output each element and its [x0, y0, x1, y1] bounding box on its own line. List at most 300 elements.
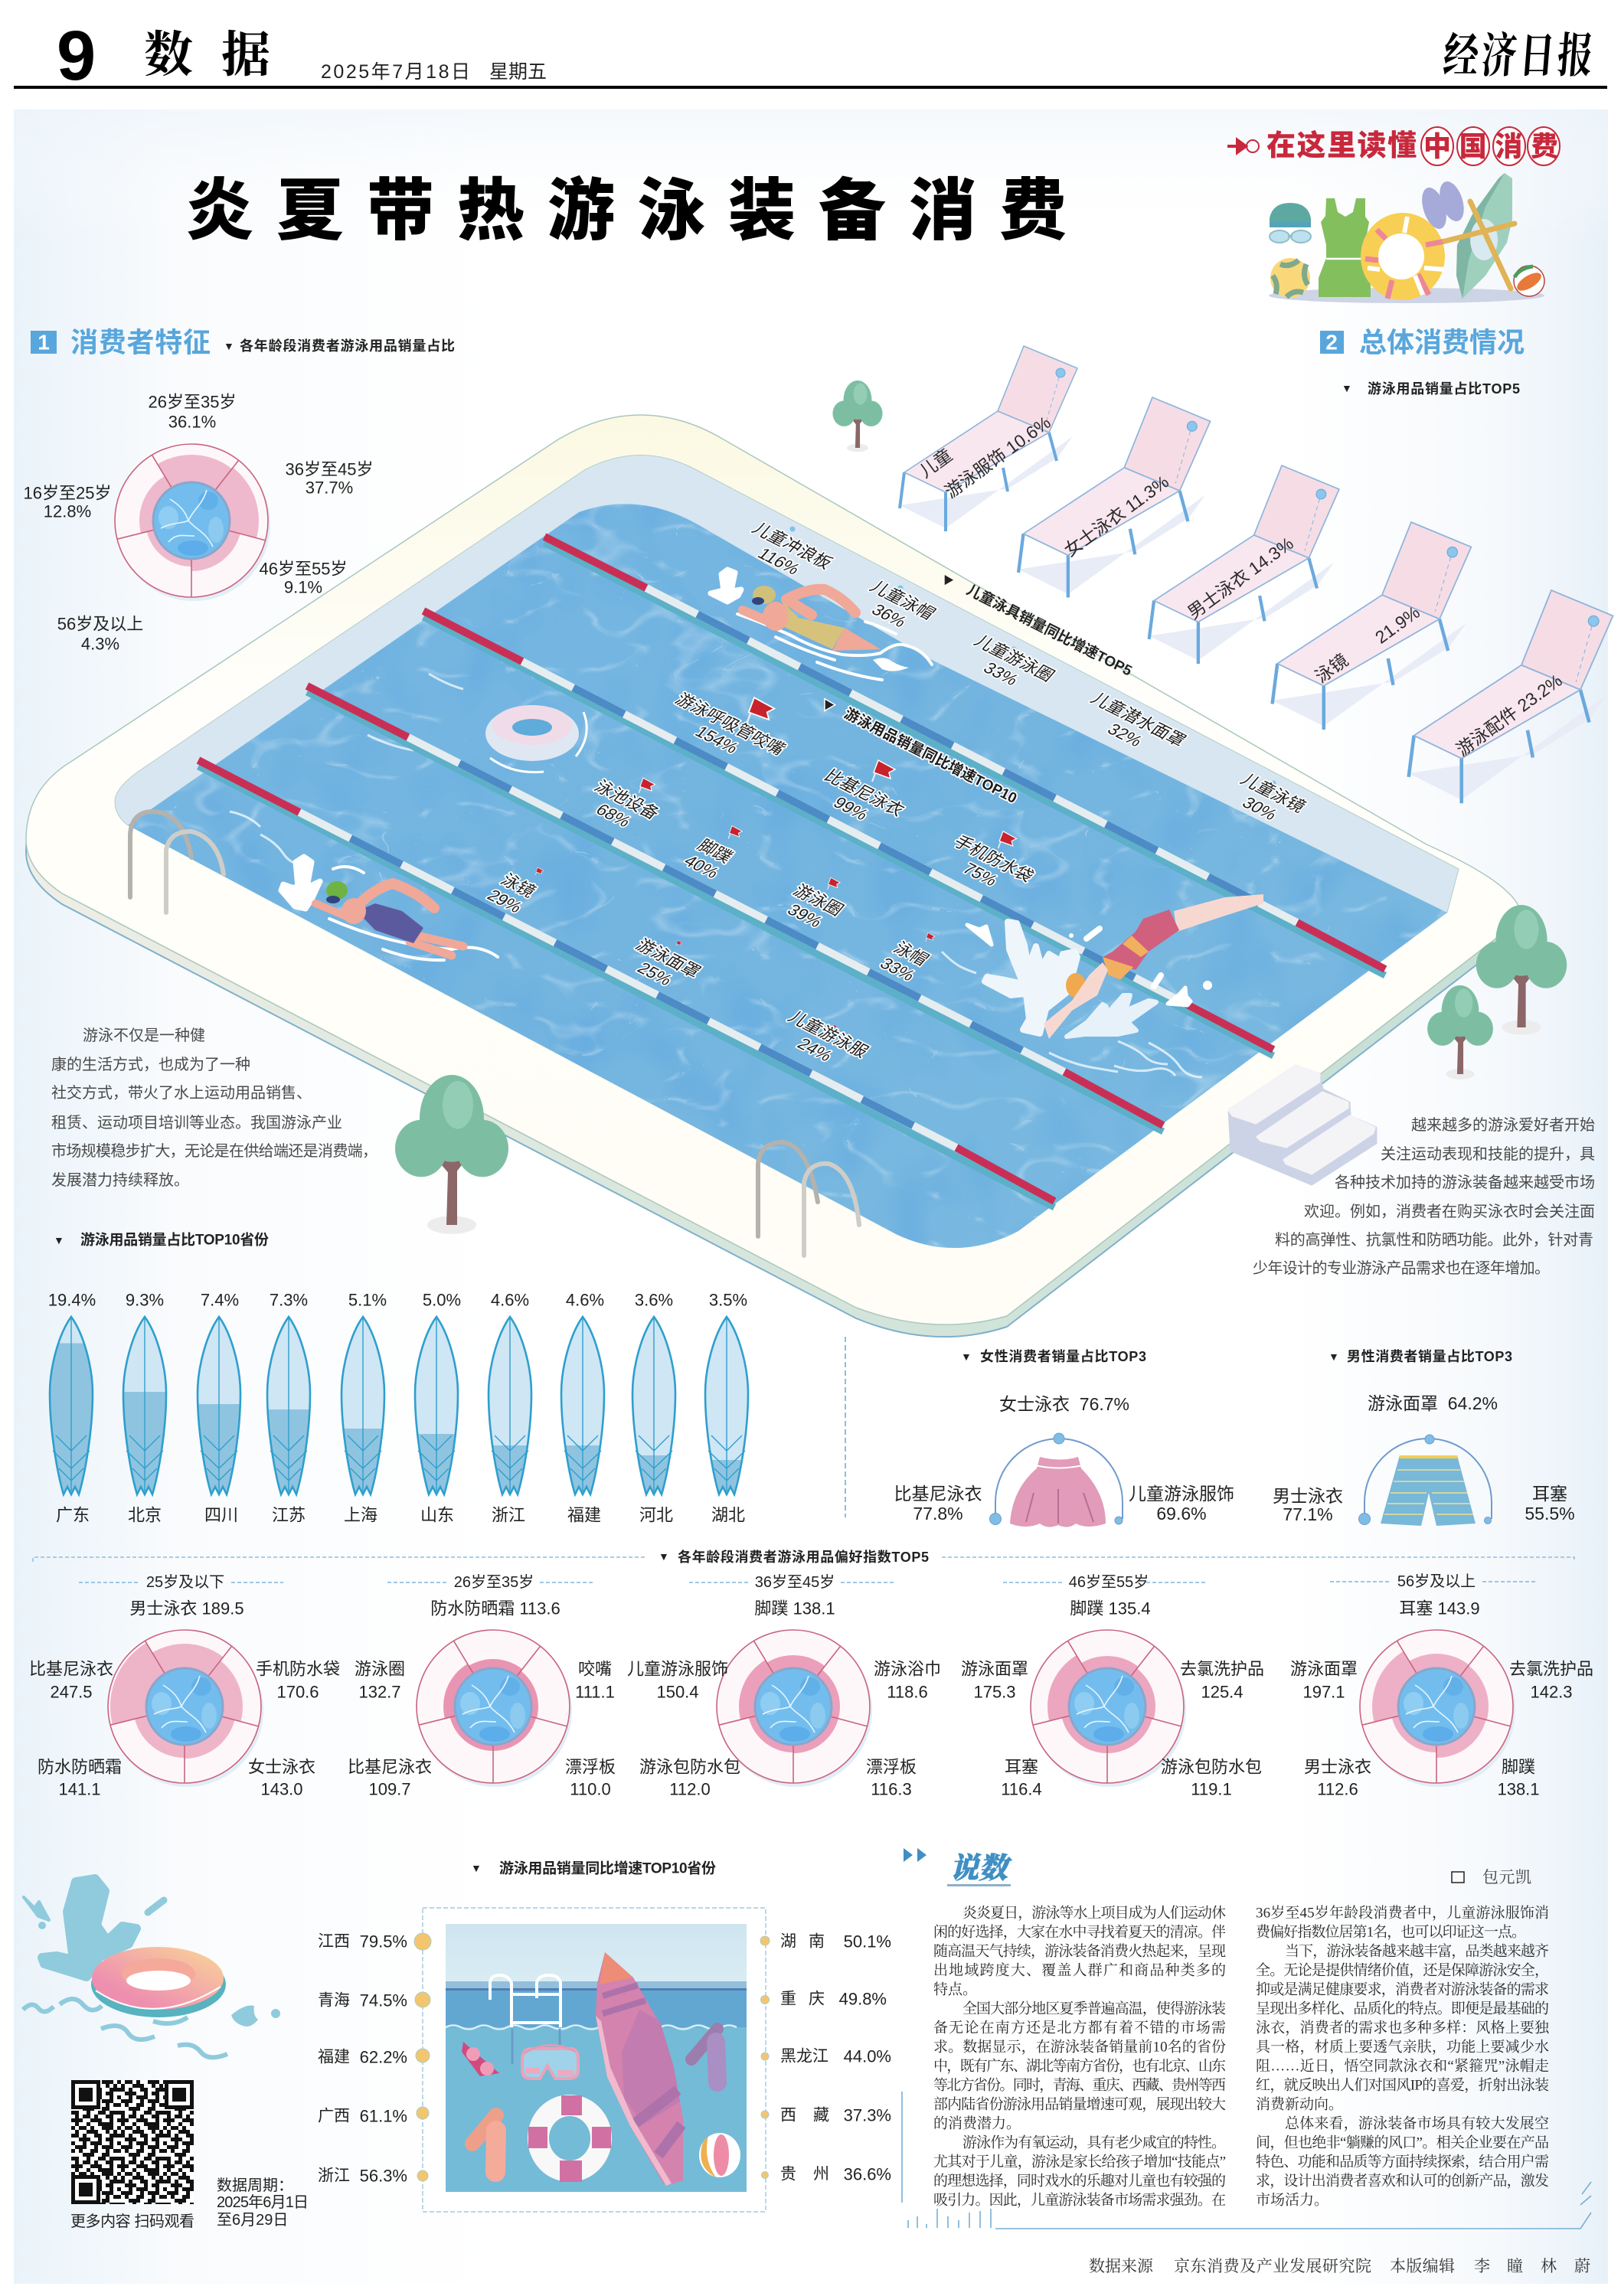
label: cap: 泳帽 — [890, 939, 933, 968]
preference: age 36 to 45: 118.6 — [887, 1683, 928, 1701]
preference: age 26 to 35: 110.0 — [570, 1779, 611, 1799]
chair 3: 男士泳衣 14.3% — [1184, 533, 1297, 623]
label: ring: 33% — [979, 659, 1022, 689]
chart: women top 3: 儿童游泳服饰 — [1129, 1484, 1234, 1504]
chart: children's gear growth top 5 — [735, 519, 1309, 831]
preference: age 26 to 35: 比基尼泳衣 — [348, 1758, 432, 1776]
preference: age up to 25: 143.0 — [260, 1779, 303, 1799]
preference: age 46 to 55: 116.4 — [1001, 1779, 1042, 1799]
label: goggles: 泳镜 — [497, 870, 540, 900]
left values: 74.5% — [360, 1991, 407, 2010]
label: pool equipment — [577, 777, 663, 838]
article column 2: 特色、功能和品质等方面持续探索，结合用户需 — [1256, 2153, 1549, 2170]
preference: age 36 to 45: 150.4 — [656, 1683, 699, 1701]
ladder: bottom — [758, 1142, 859, 1256]
preference: age up to 25: 男士泳衣 189.5 — [129, 1599, 244, 1618]
age labels: 36.1% — [168, 412, 216, 432]
chair 1: 儿童 — [916, 445, 956, 482]
label: goggles — [1224, 770, 1309, 831]
chart subtitle: preference index: ▼ — [659, 1550, 669, 1563]
board: Hubei: 湖北 — [711, 1505, 745, 1525]
newspaper header — [14, 17, 1607, 95]
chart subtitle: top 5 items: ▼ — [1342, 382, 1352, 394]
label: goggles: 29% — [483, 887, 526, 916]
subtitle: 女性消费者销量占比TOP3 — [980, 1349, 1146, 1364]
article column 1: 的消费潜力。 — [933, 2115, 1021, 2131]
preference: age 36 to 45: 游泳浴巾 — [874, 1660, 941, 1678]
chart: women top 3: 69.6% — [1156, 1504, 1207, 1524]
ladder — [490, 1975, 560, 2027]
preference: age 36 to 45: 儿童游泳服饰 — [627, 1660, 728, 1678]
preference: age 56 and over: 去氯洗护品 — [1509, 1660, 1593, 1678]
water — [115, 482, 1462, 1279]
preference: age up to 25: 170.6 — [276, 1683, 319, 1701]
diving mask — [522, 2045, 578, 2079]
chair 2 — [1018, 397, 1211, 597]
icon: green surfboard — [1456, 173, 1512, 299]
arc — [989, 1433, 1123, 1525]
chart: surfboards province share — [48, 1291, 750, 1525]
page number: 9 — [57, 17, 96, 95]
article column 1: 求。数据显示，在游泳装备销量前10名的省份 — [933, 2038, 1226, 2055]
column tag: read China consumption here: 在这里读懂 — [1266, 130, 1417, 162]
lane ropes — [198, 537, 1385, 1207]
ladder: left — [130, 812, 224, 913]
label: ring — [957, 632, 1058, 701]
right values: 36.6% — [844, 2165, 891, 2183]
chart subtitle: age share: ▼ — [224, 340, 234, 352]
label: snorkel: 游泳呼吸管咬嘴 — [672, 690, 789, 758]
article column 1: 闲的好选择，大家在水中寻找着夏天的清凉。伴 — [933, 1923, 1226, 1940]
footer credits: 京东消费及产业发展研究院 — [1174, 2257, 1371, 2275]
right values: 西藏 — [780, 2107, 829, 2124]
preference: age 56 and over: 男士泳衣 — [1304, 1758, 1371, 1776]
preference: age 46 to 55: 175.3 — [973, 1683, 1016, 1701]
article column 2: 抑或是满足健康要求，消费者对游泳装备的需求 — [1256, 1981, 1549, 1998]
data period note: 2025年6月1日 — [217, 2193, 309, 2211]
left values: 广西 — [318, 2107, 350, 2125]
text block: left intro: 市场规模稳步扩大，无论是在供给端还是消费端， — [51, 1142, 377, 1160]
preference: age 26 to 35 — [348, 1573, 616, 1799]
label: surfboard: 116% — [754, 544, 804, 578]
left values: 江西 — [318, 1932, 350, 1951]
icon group: swimming gear — [1269, 173, 1544, 303]
heading: section 2 overall consumption: 总体消费情况 — [1359, 326, 1525, 358]
board: Jiangsu — [266, 1291, 312, 1525]
label: phone pouch: 75% — [959, 860, 1002, 890]
text block: left intro: 社交方式，带火了水上运动用品销售、 — [51, 1084, 312, 1102]
age labels: 36岁至45岁 — [286, 459, 373, 479]
scene: pool — [446, 1924, 747, 2192]
age labels: 37.7% — [306, 478, 353, 498]
preference: age 26 to 35: 111.1 — [575, 1683, 615, 1701]
chart: item growth top 10 — [483, 690, 1038, 1076]
label: phone pouch: 手机防水袋 — [949, 832, 1038, 885]
preference: age 36 to 45: 脚蹼 138.1 — [754, 1599, 835, 1618]
label: fins: 40% — [680, 852, 723, 882]
preference: age 56 and over: 197.1 — [1302, 1683, 1345, 1701]
preference: age 46 to 55 — [961, 1573, 1264, 1799]
label: cap: 36% — [868, 601, 910, 631]
label: ring: 39% — [783, 901, 826, 931]
main title: 炎夏带热游泳装备消费 — [186, 156, 1090, 254]
label: kids swimwear: 儿童游泳服 — [784, 1008, 872, 1060]
chart: women top 3: 比基尼泳衣 — [894, 1484, 982, 1504]
subtitle: ▶ — [824, 699, 835, 711]
label: cap: 33% — [876, 955, 919, 985]
section name: 数据 — [144, 28, 299, 83]
right values — [760, 1932, 891, 2183]
icon: swim ring — [1361, 213, 1445, 300]
preference: age 26 to 35: 漂浮板 — [565, 1758, 616, 1776]
preference: age 26 to 35: 132.7 — [358, 1683, 401, 1701]
label: goggles: 儿童泳镜 — [1237, 770, 1309, 815]
age labels: 4.3% — [81, 634, 119, 654]
tree: right small — [1427, 985, 1493, 1079]
article column 2: 当下，游泳装备越来越丰富，品类越来越齐 — [1285, 1942, 1549, 1960]
chart subtitle: preference index: 各年龄段消费者游泳用品偏好指数TOP5 — [678, 1549, 929, 1565]
pool deck side — [26, 426, 1521, 1337]
age labels — [24, 392, 373, 654]
board: Sichuan — [196, 1291, 242, 1525]
icon: swim ring with splash — [23, 1879, 280, 2057]
preference: age 26 to 35: 109.7 — [368, 1779, 411, 1799]
icon: paddle — [1445, 201, 1515, 289]
swimmer: bottom — [281, 857, 498, 960]
board: Shandong: 5.0% — [423, 1291, 461, 1309]
label: cap — [876, 932, 935, 985]
article column 2: 市场活力。 — [1256, 2191, 1329, 2208]
footer credits: 数据来源 — [1089, 2257, 1154, 2275]
right values: 重庆 — [780, 1991, 825, 2007]
subtitle: 男性消费者销量占比TOP3 — [1347, 1349, 1512, 1364]
text block: right intro — [1253, 1116, 1595, 1277]
preference: age up to 25: 比基尼泳衣 — [29, 1660, 113, 1678]
article column 2: 红，就反映出人们对国风IP的喜爱，折射出泳装 — [1256, 2076, 1549, 2093]
age labels: 56岁及以上 — [57, 614, 143, 634]
data period note: 数据周期： — [217, 2177, 293, 2194]
label: cap — [853, 577, 939, 639]
board: Beijing — [122, 1291, 168, 1525]
preference: age 46 to 55: 游泳包防水包 — [1161, 1758, 1262, 1776]
right values: 37.3% — [844, 2105, 891, 2125]
board: Shandong — [413, 1291, 461, 1525]
preference: age up to 25: 女士泳衣 — [248, 1758, 315, 1776]
left values: 56.3% — [360, 2167, 407, 2185]
preference: age 36 to 45 — [627, 1573, 941, 1799]
preference: age 56 and over: 112.6 — [1317, 1779, 1358, 1799]
chart: age donut — [115, 444, 270, 601]
article column 2: 全。无论是提供情绪价值，还是保障游泳安全， — [1256, 1961, 1549, 1978]
text block: left intro: 游泳不仅是一种健 — [83, 1027, 205, 1044]
label: face mask — [619, 936, 704, 997]
icon: green swimsuit — [1319, 198, 1371, 297]
label: snorkel: 154% — [691, 723, 743, 757]
chart: men top 3: 游泳面罩 64.2% — [1368, 1393, 1498, 1413]
chart: province growth with pool illustration — [318, 1908, 891, 2212]
board: Zhejiang: 浙江 — [492, 1505, 525, 1525]
data period note — [217, 2177, 309, 2229]
article column 2 — [1256, 1905, 1550, 2208]
article column 1: 游泳作为有氧运动，具有老少咸宜的特性。 — [962, 2134, 1226, 2151]
article column 1: 的理想选择，同时戏水的乐趣对儿童也有较强的 — [933, 2171, 1226, 2190]
right values: 湖南 — [780, 1932, 825, 1951]
label: fins — [680, 826, 742, 882]
board: Shanghai: 上海 — [344, 1505, 377, 1525]
footer credits: 林 — [1541, 2257, 1557, 2275]
text block: right intro: 越来越多的游泳爱好者开始 — [1411, 1116, 1595, 1134]
right values: 44.0% — [844, 2047, 891, 2066]
chart: men top 3: 耳塞 — [1532, 1484, 1567, 1504]
board: Zhejiang — [487, 1291, 533, 1525]
arc — [1358, 1435, 1492, 1525]
preference: age 36 to 45: 游泳包防水包 — [639, 1758, 740, 1776]
article column 1: 中，既有广东、湖北等南方省份，也有北京、山东 — [933, 2058, 1226, 2075]
text block: left intro: 发展潜力持续释放。 — [51, 1171, 189, 1189]
chair 4 — [1273, 522, 1471, 730]
label: goggles: 30% — [1238, 794, 1281, 824]
label: bikini: 99% — [829, 794, 872, 824]
board: Shanghai — [340, 1291, 387, 1525]
chart subtitle: top 10 provinces: 游泳用品销量占比TOP10省份 — [80, 1231, 269, 1248]
subtitle: 儿童泳具销量同比增速TOP5 — [964, 581, 1136, 680]
footer credits: 本版编辑 — [1390, 2257, 1455, 2275]
label: goggles — [483, 867, 544, 916]
text block: left intro — [51, 1027, 377, 1189]
board: Fujian: 4.6% — [566, 1291, 604, 1309]
preference: age 36 to 45: 36岁至45岁 — [755, 1573, 835, 1591]
chair 4: 21.9% — [1371, 602, 1423, 648]
chart: men top 3 — [1273, 1349, 1575, 1526]
weekday: 星期五 — [489, 61, 547, 83]
label: phone pouch — [936, 831, 1038, 901]
chart subtitle: top 10 provinces: ▼ — [54, 1234, 64, 1246]
chart: women top 3 — [894, 1349, 1234, 1527]
board: Beijing: 北京 — [128, 1505, 162, 1525]
inner tube — [485, 705, 587, 772]
chart subtitle: top 5 items: 游泳用品销量占比TOP5 — [1368, 380, 1520, 397]
footer credits: 蔚 — [1574, 2257, 1590, 2275]
preference: age up to 25: 手机防水袋 — [256, 1660, 340, 1678]
age labels: 46岁至55岁 — [260, 559, 347, 579]
date: 2025年7月18日 — [321, 61, 470, 83]
preference: age 56 and over: 56岁及以上 — [1397, 1573, 1476, 1590]
preference: age 56 and over: 142.3 — [1530, 1683, 1573, 1701]
preference: age 56 and over — [1290, 1573, 1593, 1799]
sunglasses — [462, 2042, 499, 2076]
board: Beijing: 9.3% — [126, 1291, 164, 1309]
board: Shandong: 山东 — [420, 1505, 454, 1525]
label: pool equipment: 泳池设备 — [590, 777, 663, 822]
label: ring: 游泳圈 — [789, 881, 848, 919]
left values — [318, 1932, 431, 2185]
label: ring: 儿童游泳圈 — [970, 632, 1058, 684]
board: Hubei — [704, 1291, 750, 1525]
pool steps — [1229, 1066, 1376, 1184]
heading: section 1 consumer characteristics: 消费者特征 — [70, 326, 211, 358]
preference: age up to 25 — [29, 1573, 340, 1799]
left values: 福建 — [318, 2049, 350, 2066]
left values: 61.1% — [360, 2107, 407, 2125]
age labels: 12.8% — [44, 502, 91, 521]
text block: right intro: 欢迎。例如，消费者在购买泳衣时会关注面 — [1304, 1203, 1595, 1220]
chart: men top 3: 55.5% — [1525, 1504, 1575, 1524]
text block: left intro: 租赁、运动项目培训等业态。我国游泳产业 — [51, 1114, 342, 1132]
article column 2: 间，但也绝非“躺赚的风口”。相关企业要在产品 — [1256, 2134, 1549, 2151]
chart subtitle: preference index — [33, 1549, 1574, 1565]
preference: age 26 to 35: 26岁至35岁 — [454, 1573, 534, 1591]
tree: top small — [832, 380, 883, 452]
chair 1 — [900, 346, 1077, 531]
board: Sichuan: 7.4% — [201, 1291, 239, 1309]
label: fins: 脚蹼 — [694, 836, 737, 866]
heading: section 2 overall consumption: 2 — [1325, 331, 1338, 354]
subtitle: ▼ — [1329, 1350, 1339, 1363]
data period note: 至6月29日 — [217, 2212, 288, 2229]
footer credits — [1089, 2257, 1590, 2275]
preference: age 46 to 55: 耳塞 — [1005, 1758, 1038, 1776]
article column 1 — [933, 1905, 1226, 2208]
age labels: 9.1% — [284, 577, 322, 597]
chair 5: 游泳配件 23.2% — [1453, 670, 1566, 760]
byline — [1452, 1868, 1531, 1886]
preference: age 36 to 45: 116.3 — [871, 1779, 912, 1799]
commentary heading: 说数 — [949, 1853, 1012, 1885]
right values: 黑龙江 — [780, 2047, 828, 2066]
commentary column — [902, 1848, 1591, 2229]
chart subtitle: province growth: 游泳用品销量同比增速TOP10省份 — [499, 1859, 716, 1877]
masthead: 经济日报 — [1441, 29, 1595, 83]
article column 1: 备无论在南方还是北方都有着不错的市场需 — [933, 2020, 1226, 2036]
lane 2 — [423, 611, 1273, 1056]
preference: age 46 to 55: 46岁至55岁 — [1069, 1573, 1149, 1591]
text block: left intro: 康的生活方式，也成为了一种 — [51, 1056, 250, 1073]
board: Hebei: 3.6% — [635, 1291, 673, 1309]
board: Zhejiang: 4.6% — [491, 1291, 529, 1309]
label: bikini — [807, 760, 908, 835]
left values: 79.5% — [360, 1932, 407, 1951]
chair 4: 泳镜 — [1312, 650, 1351, 687]
preference: age up to 25: 247.5 — [50, 1683, 93, 1701]
icon: skirt — [1010, 1457, 1106, 1527]
label: face mask: 25% — [633, 959, 676, 989]
preference: age 56 and over: 游泳面罩 — [1290, 1660, 1358, 1678]
preference: age 46 to 55: 119.1 — [1191, 1779, 1232, 1799]
icon: flip flops — [1417, 178, 1469, 232]
swimmer: top — [711, 570, 932, 680]
article column 1: 随高温天气持续，游泳装备消费火热起来，呈现 — [933, 1943, 1226, 1960]
flip flops salmon — [472, 2115, 496, 2172]
column tag: read China consumption here — [1227, 127, 1560, 165]
label: surfboard: 儿童冲浪板 — [748, 519, 836, 572]
text block: right intro: 各种技术加持的游泳装备越来越受市场 — [1335, 1174, 1595, 1191]
article column 2: 求，设计出消费者喜欢和认可的创新产品，激发 — [1256, 2173, 1549, 2190]
preference: age 36 to 45: 112.0 — [669, 1779, 711, 1799]
byline: 包元凯 — [1482, 1868, 1531, 1886]
preference: age 36 to 45: 漂浮板 — [866, 1758, 917, 1776]
board: Hubei: 3.5% — [709, 1291, 747, 1309]
left values: 青海 — [318, 1992, 350, 2009]
preference: age 56 and over: 耳塞 143.9 — [1399, 1599, 1480, 1618]
age labels: 16岁至25岁 — [24, 484, 111, 502]
right values: 50.1% — [844, 1932, 891, 1951]
flip flops purple — [691, 2029, 717, 2082]
article column 2: 阻……近日，悟空同款泳衣和“紧箍咒”泳帽走 — [1256, 2058, 1549, 2075]
chart: men top 3: 男士泳衣 — [1273, 1486, 1343, 1506]
article column 1: 部内陆省份游泳用品销量增速可观，展现出较大 — [933, 2096, 1226, 2113]
label: cap: 儿童泳帽 — [866, 577, 939, 622]
board: Shanghai: 5.1% — [348, 1291, 387, 1309]
article column 1: 尤其对于儿童，游泳是家长给孩子增加“技能点” — [933, 2153, 1226, 2170]
chart: deck chairs top 5 — [900, 346, 1613, 803]
pool wall — [115, 455, 1459, 913]
label: kids swimwear — [771, 1008, 872, 1076]
lane 3 — [307, 686, 1163, 1132]
tree: right big — [1476, 905, 1567, 1035]
board: Guangdong — [48, 1291, 96, 1525]
article column 1: 出地域跨度大、覆盖人群广和商品种类多的 — [933, 1961, 1226, 1978]
beach ball — [699, 2133, 740, 2177]
label: kids swimwear: 24% — [793, 1035, 836, 1065]
chart: men top 3: 77.1% — [1283, 1504, 1333, 1524]
board: Jiangsu: 江苏 — [272, 1505, 306, 1525]
QR caption: 更多内容 扫码观看 — [70, 2213, 194, 2230]
label: diving mask: 32% — [1103, 720, 1146, 750]
label: ring — [776, 877, 848, 935]
board: Fujian — [560, 1291, 606, 1525]
left values: 62.2% — [360, 2047, 407, 2067]
preference: age 46 to 55: 脚蹼 135.4 — [1070, 1599, 1151, 1618]
text block: right intro: 料的高弹性、抗氯性和防晒功能。此外，针对青 — [1275, 1231, 1593, 1249]
preference: age up to 25: 防水防晒霜 — [38, 1758, 122, 1776]
preference: age 46 to 55: 125.4 — [1201, 1683, 1244, 1701]
left values: 浙江 — [318, 2167, 350, 2185]
chart: women top 3: 77.8% — [913, 1504, 963, 1524]
label: diving mask: 儿童潜水面罩 — [1087, 689, 1190, 750]
board: Fujian: 福建 — [567, 1505, 601, 1525]
preference: age 26 to 35: 游泳圈 — [355, 1660, 405, 1678]
commentary arrows — [904, 1848, 927, 1862]
article column 2: 总体来看，游泳装备市场具有较大发展空 — [1285, 2115, 1549, 2131]
article column 1: 等北方省份。同时，青海、重庆、西藏、贵州等西 — [933, 2076, 1226, 2093]
column tag: read China consumption here: 中国消费 — [1423, 130, 1558, 162]
chart subtitle: province growth: ▼ — [471, 1862, 482, 1874]
article column 2: 消费新动向。 — [1256, 2096, 1343, 2113]
article column 1: 全国大部分地区夏季普遍高温，使得游泳装 — [962, 2000, 1226, 2017]
label: face mask: 游泳面罩 — [632, 936, 704, 981]
icon: striped ball — [1514, 266, 1544, 296]
surfboard — [596, 1952, 683, 2186]
footer credits: 瞳 — [1507, 2257, 1523, 2275]
label: surfboard — [735, 519, 836, 588]
article column 2: 费偏好指数位居第1名，也可以印证这一点。 — [1256, 1923, 1526, 1940]
article column 2: 泳衣，消费者的需求也多种多样：风格上要独 — [1256, 2020, 1550, 2036]
article column 2: 具一格，材质上要透气亲肤，功能上要减少水 — [1256, 2038, 1549, 2055]
text block: right intro: 少年设计的专业游泳产品需求也在逐年增加。 — [1253, 1259, 1550, 1277]
icon: cap and goggles — [1270, 203, 1311, 243]
label: pool equipment: 68% — [592, 801, 635, 831]
tree: left big — [395, 1075, 508, 1234]
board: Sichuan: 四川 — [204, 1505, 238, 1525]
preference: age 56 and over: 脚蹼 — [1502, 1758, 1535, 1776]
article column 2: 36岁至45岁年龄段消费者中，儿童游泳服饰消 — [1256, 1905, 1549, 1922]
trees — [395, 905, 1567, 1234]
preference: age up to 25: 141.1 — [58, 1779, 101, 1799]
article column 1: 吸引力。因此，儿童游泳装备市场需求强劲。在 — [933, 2191, 1226, 2208]
lane 4 — [198, 760, 1054, 1207]
chart subtitle: age share: 各年龄段消费者游泳用品销量占比 — [240, 338, 455, 354]
QR code — [71, 2080, 194, 2204]
